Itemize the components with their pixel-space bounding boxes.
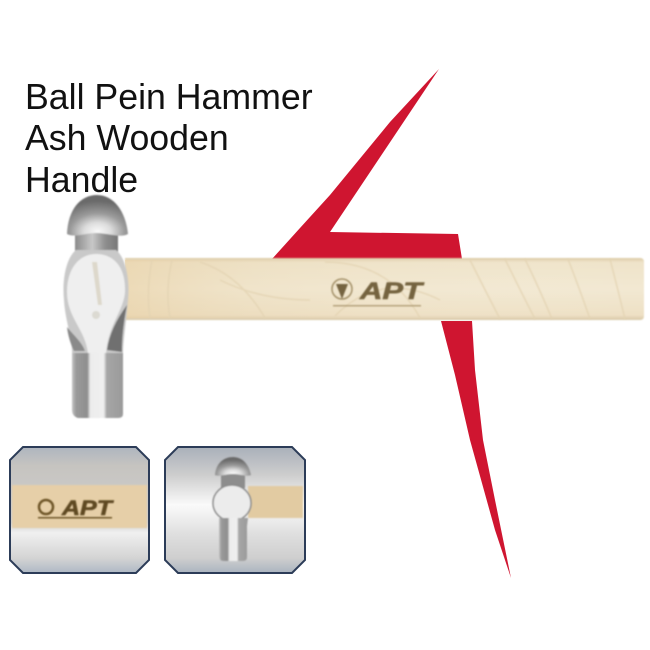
left dark wedge: [67, 327, 85, 351]
APT logo: APT: [359, 278, 425, 305]
logo emblem: [332, 279, 352, 299]
cheek: [64, 250, 128, 356]
inset: logo close-up: [10, 447, 149, 573]
red lightning bolt upper part: [272, 69, 462, 259]
steel head: [64, 195, 128, 418]
inset hammer: [213, 457, 251, 561]
inset handle band: [12, 485, 147, 528]
APT logo: [332, 278, 425, 306]
inset handle: [248, 486, 303, 518]
inset logo: APT: [61, 497, 115, 520]
title: Handle: [25, 160, 138, 200]
hammer: [64, 195, 644, 418]
inset: hammer head close-up: [165, 447, 305, 573]
cheek light panel: [67, 254, 125, 354]
red lightning bolt lower part: [441, 321, 511, 578]
wooden handle: [125, 258, 644, 320]
title: Ball Pein Hammer: [25, 77, 313, 117]
face cylinder: [72, 353, 123, 418]
engraved marks: [92, 262, 102, 305]
title: Ash Wooden: [25, 118, 229, 158]
ball pein: [67, 195, 128, 236]
right dark wedge: [107, 305, 127, 352]
neck: [75, 232, 118, 256]
